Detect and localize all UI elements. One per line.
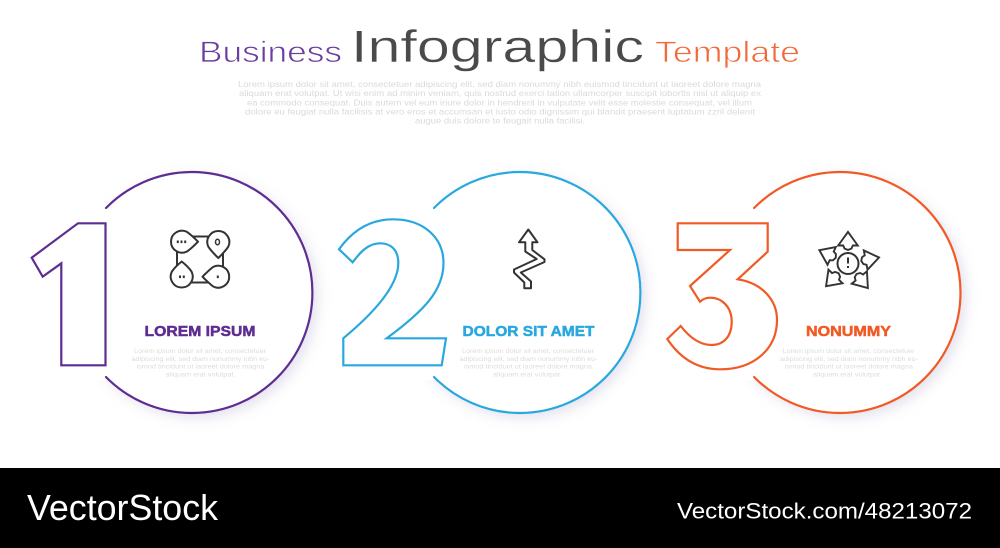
body text xyxy=(132,348,270,378)
body text: adipiscing elit, sed diam nonummy nibh eu- xyxy=(780,356,918,363)
heading: nonummy: NONUMMY xyxy=(806,324,891,340)
intro paragraph: Lorem ipsum dolor sit amet, consectetuer adipiscing elit, sed diam nonummy nibh euismod tincidunt ut laoreet dolore magna xyxy=(238,79,761,89)
footer bar xyxy=(0,468,1000,548)
title xyxy=(199,21,800,72)
body text: Lorem ipsum dolor sit amet, consectetuer xyxy=(134,348,266,355)
number 2 xyxy=(339,219,446,365)
body text: aliquam erat volutpat. xyxy=(166,372,236,378)
panel: step 1 xyxy=(20,172,317,417)
circle outline xyxy=(434,172,640,413)
heading: dolor sit amet: DOLOR SIT AMET xyxy=(462,324,595,340)
circle outline xyxy=(754,172,961,413)
title: Template xyxy=(655,36,800,69)
panel: step 2 xyxy=(339,172,644,417)
heading: lorem ipsum: LOREM IPSUM xyxy=(144,324,256,340)
body text xyxy=(780,348,918,378)
intro paragraph: ea commodo consequat. Duis autem vel eum iriure dolor in hendrerit in vulputate velit esse molestie consequat, vel illum xyxy=(247,98,752,108)
icon: winding road arrow xyxy=(514,230,544,288)
icon: connected location pins xyxy=(171,231,229,288)
intro paragraph: augue duis dolore te feugait nulla facilisi. xyxy=(415,116,585,126)
footer logo: VectorStock xyxy=(27,487,219,528)
body text: aliquam erat volutpat. xyxy=(493,372,562,378)
intro paragraph: dolore eu feugiat nulla facilisis at vero eros et accumsan et iusto odio dignissim qui blandit praesent luptatum zzril delenit xyxy=(245,106,756,116)
body text: ismod tincidunt ut laoreet dolore magna xyxy=(785,364,914,370)
number 3 xyxy=(667,223,777,369)
body text: adipiscing elit, sed diam nonummy nibh eu- xyxy=(132,356,270,363)
number 1 xyxy=(32,223,106,365)
title: Business xyxy=(199,36,342,69)
body text: Lorem ipsum dolor sit amet, consectetuer xyxy=(462,348,594,355)
panel: step 3 xyxy=(660,172,965,417)
intro paragraph xyxy=(238,79,762,126)
footer image id: VectorStock.com/48213072 xyxy=(677,498,972,524)
body text: adipiscing elit, sed diam nonummy nibh eu- xyxy=(460,356,598,363)
body text: aliquam erat volutpat. xyxy=(813,372,882,378)
circle outline xyxy=(106,172,312,413)
body text: ismod tincidunt ut laoreet dolore magna xyxy=(136,364,265,370)
title: Infographic xyxy=(351,21,644,72)
body text: Lorem ipsum dolor sit amet, consectetuer xyxy=(782,348,914,355)
body text: ismod tincidunt ut laoreet dolore magna xyxy=(464,364,593,370)
body text xyxy=(460,348,598,378)
icon: arrows around warning circle xyxy=(815,232,881,294)
intro paragraph: aliquam erat volutpat. Ut wisi enim ad minim veniam, quis nostrud exerci tation ullamcorper suscipit lobortis nisl ut aliquip ex xyxy=(239,88,762,98)
